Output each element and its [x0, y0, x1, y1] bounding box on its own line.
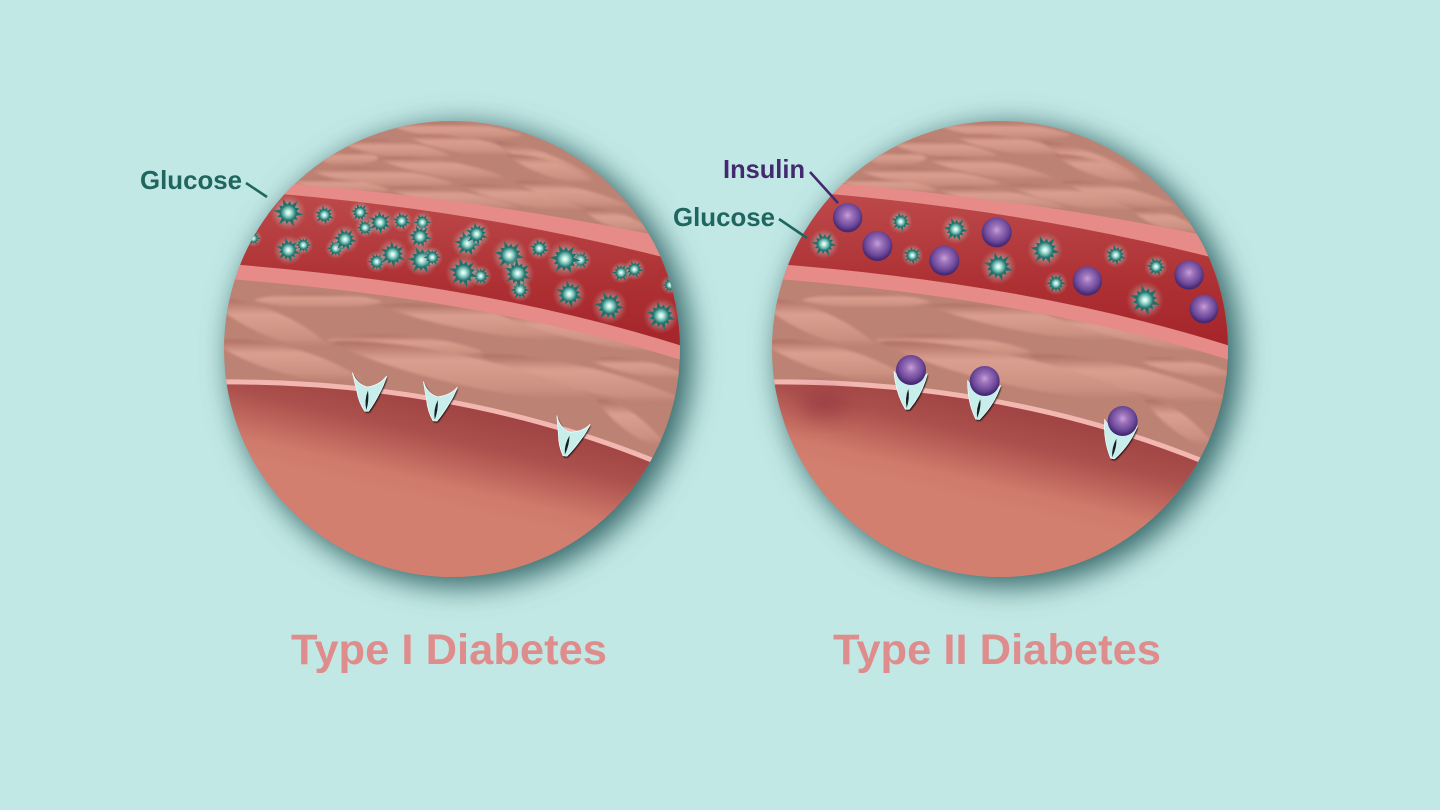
label: insulin type II: [723, 154, 838, 203]
panel: type I circle shadow: [230, 125, 692, 587]
label: glucose type II: [673, 202, 807, 238]
glucose molecules: type II: [807, 207, 1169, 324]
panel: type II circle shadow: [778, 125, 1240, 587]
glucose molecules: type I: [245, 192, 683, 338]
insulin molecules in vessel: [833, 203, 1218, 323]
dark spot in cell: [800, 392, 847, 418]
label: glucose type II: Glucose: [673, 202, 775, 232]
label: glucose type I: Glucose: [140, 165, 242, 195]
panel: type II diabetes tissue illustration: [772, 121, 1228, 577]
heading: type I diabetes: Type I Diabetes: [291, 626, 607, 674]
receptors: type I: [352, 373, 592, 461]
panel: type I diabetes tissue illustration: [224, 121, 680, 577]
receptors with bound insulin: [894, 355, 1139, 463]
label: insulin type II: Insulin: [723, 154, 805, 184]
heading: type II diabetes: Type II Diabetes: [833, 626, 1161, 674]
